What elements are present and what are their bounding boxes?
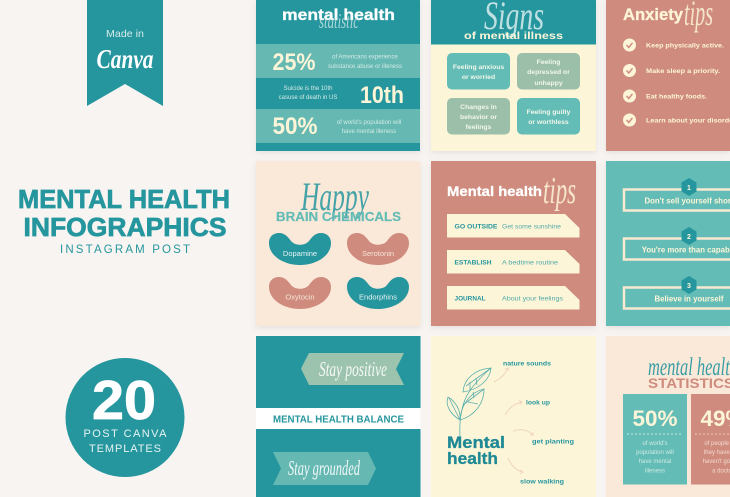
sign card 3 bbox=[447, 98, 510, 134]
affirmation 2: 2 bbox=[687, 234, 691, 241]
stat 25%: 25% bbox=[272, 49, 316, 76]
sign card 4: Feeling guilty bbox=[527, 109, 571, 116]
activity: look up: look up bbox=[526, 400, 550, 406]
stat card 50%: of world's bbox=[642, 441, 668, 447]
sign card 1: or worried bbox=[462, 74, 495, 81]
tip 3: Eat healthy foods. bbox=[646, 94, 707, 100]
panel: numbered affirmations bbox=[606, 161, 730, 326]
stat 50% caption bbox=[337, 120, 401, 135]
tip 4 bbox=[623, 114, 730, 126]
tip 2: Make sleep a priority. bbox=[646, 68, 720, 75]
panel: mental health activities bbox=[431, 336, 596, 497]
arrow banner: stay grounded: Stay grounded bbox=[288, 456, 360, 480]
panel: mental health tips bbox=[431, 161, 596, 326]
ribbon: made in Canva bbox=[87, 0, 163, 106]
script heading: Happy bbox=[300, 174, 369, 219]
affirmation 3 bbox=[624, 276, 730, 308]
script heading: tips bbox=[543, 170, 576, 212]
heading: Mental bbox=[447, 433, 505, 452]
sign card 2: depressed or bbox=[527, 69, 570, 76]
stat card 50%: illeness bbox=[645, 468, 665, 474]
tip row: journal: JOURNAL bbox=[454, 296, 486, 302]
tip row: establish: ESTABLISH bbox=[454, 260, 492, 266]
bean: endorphins bbox=[347, 277, 409, 309]
tip 2 bbox=[623, 64, 720, 77]
heading: health bbox=[447, 449, 498, 468]
panel: mental health statistics bbox=[606, 336, 730, 497]
affirmation 3: 3 bbox=[687, 283, 691, 290]
stat card 50%: population will bbox=[636, 450, 674, 456]
affirmation 1 bbox=[624, 178, 730, 210]
activity: look up bbox=[505, 400, 550, 415]
ribbon: made in Canva: Canva bbox=[96, 44, 154, 74]
sign card 1 bbox=[447, 53, 510, 90]
panel: signs of mental illness bbox=[431, 0, 596, 151]
bean: dopamine bbox=[269, 233, 331, 265]
panel: anxiety tips bbox=[606, 0, 730, 151]
badge: 20 post canva templates: TEMPLATES bbox=[89, 443, 161, 455]
badge: 20 post canva templates: POST CANVA bbox=[84, 428, 167, 440]
stat 25% caption bbox=[328, 54, 402, 70]
sign card 3: Changes in bbox=[460, 104, 497, 111]
sign card 2: unhappy bbox=[534, 80, 563, 87]
activity: slow walking bbox=[508, 458, 564, 486]
bean: dopamine: Dopamine bbox=[283, 249, 317, 258]
main title bbox=[18, 186, 230, 256]
arrow banner: stay grounded bbox=[273, 452, 376, 485]
affirmation 3: Believe in yourself bbox=[655, 294, 724, 304]
sign card 1: Feeling anxious bbox=[453, 64, 504, 71]
heading: mental health bbox=[282, 7, 395, 24]
main title: MENTAL HEALTH bbox=[18, 186, 230, 214]
main title: INFOGRAPHICS bbox=[24, 214, 226, 242]
affirmation 2 bbox=[624, 227, 730, 260]
stat 25% caption: substance abuse or illeness bbox=[328, 64, 402, 70]
heading: Mental health bbox=[447, 183, 542, 199]
tip 3 bbox=[623, 90, 707, 102]
balance band: MENTAL HEALTH BALANCE bbox=[273, 414, 404, 426]
stat card 50% bbox=[623, 394, 687, 484]
heading: STATISTICS bbox=[648, 375, 730, 391]
sign card 4: or worthless bbox=[528, 119, 569, 126]
stat 10th caption: Suicide is the 10th bbox=[283, 86, 333, 92]
panel: mental health balance bbox=[256, 336, 420, 497]
activity: get planting bbox=[513, 430, 574, 446]
heading: Anxiety bbox=[623, 6, 684, 24]
stat card 50%: have mental bbox=[639, 459, 671, 465]
activity: get planting: get planting bbox=[532, 438, 574, 446]
tip row: go outside bbox=[447, 214, 580, 238]
tip 1 bbox=[623, 38, 724, 52]
arrow banner: stay positive: Stay positive bbox=[319, 357, 387, 381]
badge: 20 post canva templates bbox=[66, 358, 184, 477]
main title: INSTAGRAM POST bbox=[60, 244, 190, 256]
tip row: go outside: Get some sunshine bbox=[502, 224, 561, 230]
icon: plant illustration bbox=[447, 368, 491, 436]
bean: serotonin bbox=[347, 233, 409, 265]
panel: mental health statistic bbox=[256, 0, 420, 151]
stat 25% caption: of Americans experience bbox=[332, 54, 399, 60]
tip 4: Learn about your disorder bbox=[646, 118, 730, 124]
bean: oxytocin: Oxytocin bbox=[285, 292, 315, 302]
stat 50% caption: of world's population will bbox=[337, 120, 401, 126]
heading: of mental illness bbox=[464, 30, 563, 42]
tip row: journal bbox=[447, 286, 580, 310]
script subtitle: statistic bbox=[319, 9, 359, 33]
bean: oxytocin bbox=[269, 277, 331, 309]
badge: 20 post canva templates: 20 bbox=[92, 369, 156, 431]
heading bbox=[447, 433, 505, 468]
stat 10th: 10th bbox=[360, 82, 404, 109]
bean: endorphins: Endorphins bbox=[359, 292, 397, 302]
tip row: go outside: GO OUTSIDE bbox=[454, 224, 498, 230]
stat 50% caption: have mental illeness bbox=[342, 129, 396, 135]
activity: nature sounds: nature sounds bbox=[503, 360, 551, 368]
tip row: establish: A bedtime routine bbox=[502, 260, 558, 266]
panel: happy brain chemicals bbox=[256, 161, 420, 326]
sign card 4 bbox=[517, 98, 580, 134]
sign card 2 bbox=[517, 53, 580, 90]
sign card 3: feelings bbox=[466, 124, 492, 131]
sign card 2: Feeling bbox=[537, 59, 560, 66]
affirmation 1: 1 bbox=[687, 185, 691, 192]
arrow banner: stay positive bbox=[301, 353, 404, 385]
stat 50%: 50% bbox=[272, 113, 318, 140]
tip row: establish bbox=[447, 250, 580, 274]
balance band bbox=[256, 408, 420, 429]
bean: serotonin: Serotonin bbox=[362, 249, 394, 258]
activity: nature sounds bbox=[494, 360, 551, 382]
stat card 49% bbox=[691, 394, 730, 484]
ribbon: made in Canva: Made in bbox=[106, 28, 144, 40]
tip 1: Keep physically active. bbox=[646, 42, 724, 50]
stat card 50%: 50% bbox=[632, 406, 678, 431]
stat 10th caption bbox=[279, 86, 337, 101]
activity: slow walking: slow walking bbox=[520, 478, 564, 486]
tip row: journal: About your feelings bbox=[502, 296, 564, 302]
heading: BRAIN CHEMICALS bbox=[276, 209, 401, 224]
stat 10th caption: casuse of death in US bbox=[279, 95, 337, 101]
sign card 3: behavior or bbox=[460, 114, 497, 121]
